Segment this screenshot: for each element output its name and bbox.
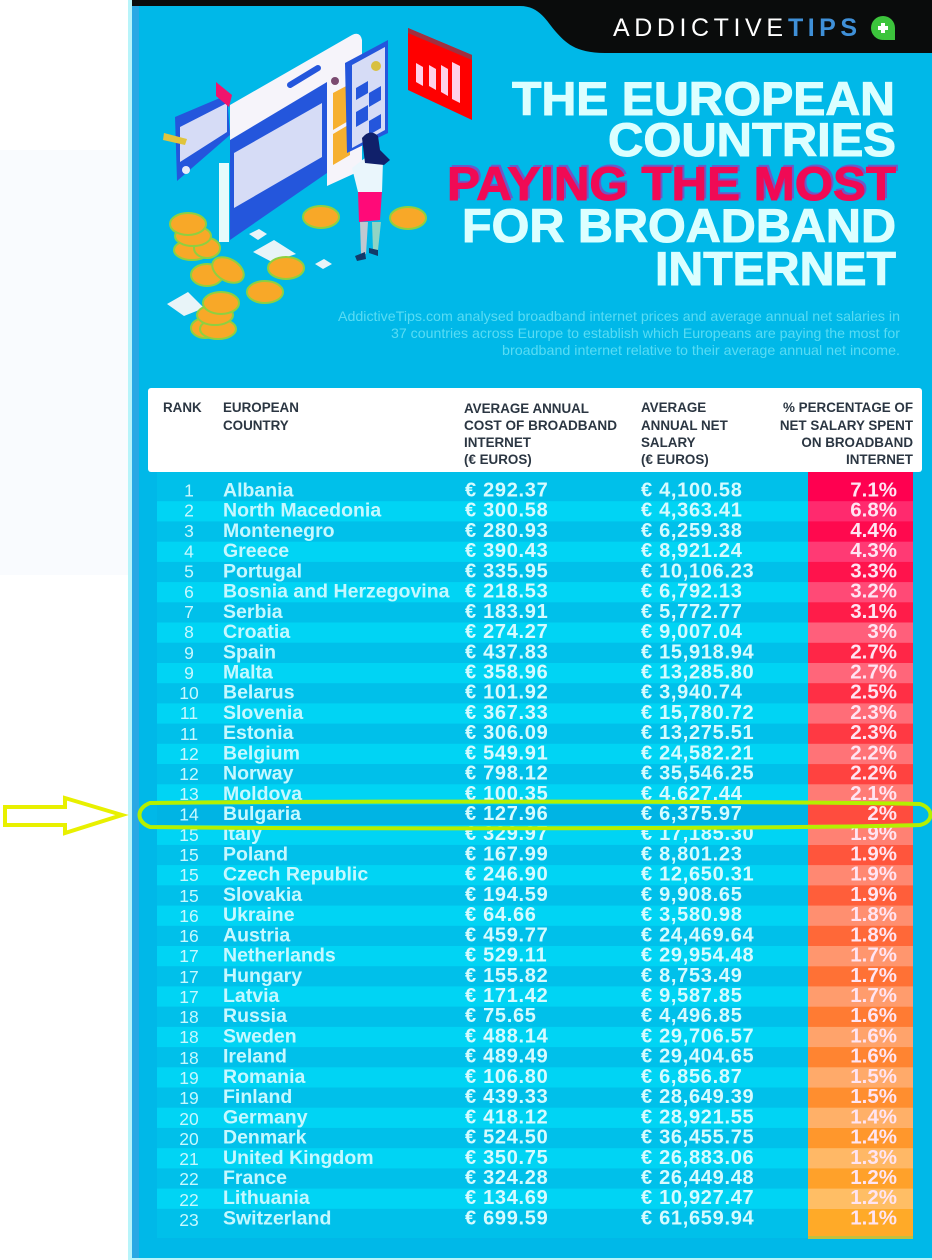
row: Moldova: 13 bbox=[179, 784, 199, 804]
row: Spain: 9 bbox=[184, 643, 194, 663]
row: Hungary: 1.7% bbox=[850, 964, 897, 987]
row: Slovakia: 1.9% bbox=[850, 883, 897, 906]
row: France: € 26,449.48 bbox=[641, 1167, 754, 1189]
white board bbox=[230, 34, 362, 186]
row: Romania: € 6,856.87 bbox=[641, 1066, 743, 1088]
row: Serbia: € 183.91 bbox=[465, 601, 548, 623]
row: Finland: € 439.33 bbox=[465, 1086, 548, 1108]
row: Norway: 2.2% bbox=[850, 762, 897, 785]
row: Spain bbox=[184, 640, 897, 663]
row: United Kingdom: United Kingdom bbox=[223, 1147, 374, 1169]
row: Slovakia: 15 bbox=[179, 886, 199, 906]
row: North Macedonia: € 300.58 bbox=[465, 500, 548, 522]
table header: SALARY bbox=[641, 435, 696, 450]
row: Norway: Norway bbox=[223, 763, 294, 785]
row: Slovakia: Slovakia bbox=[223, 884, 302, 906]
row: Bosnia and Herzegovina bbox=[184, 580, 897, 603]
row: Latvia: 17 bbox=[179, 987, 199, 1007]
row: Malta: 9 bbox=[184, 663, 194, 683]
row: Spain: 2.7% bbox=[850, 640, 897, 663]
row: Greece: € 8,921.24 bbox=[641, 540, 743, 562]
row: France: France bbox=[223, 1167, 287, 1189]
row: Slovenia: 2.3% bbox=[850, 701, 897, 724]
table header: RANK bbox=[163, 400, 202, 415]
woman bbox=[352, 132, 390, 261]
row: Russia bbox=[179, 1004, 897, 1027]
row: Sweden: € 488.14 bbox=[465, 1025, 549, 1047]
row: Finland: 1.5% bbox=[850, 1085, 897, 1108]
row: Italy: € 329.97 bbox=[465, 823, 548, 845]
row: Romania: 1.5% bbox=[850, 1065, 897, 1088]
row: Slovenia: 11 bbox=[180, 703, 198, 723]
row: Denmark: € 36,455.75 bbox=[641, 1126, 754, 1148]
phone bbox=[345, 40, 388, 153]
row: Romania: 19 bbox=[179, 1068, 199, 1088]
table header: COUNTRY bbox=[223, 418, 289, 433]
orange panels on board bbox=[333, 84, 350, 130]
row: Portugal: € 10,106.23 bbox=[641, 560, 754, 582]
row: United Kingdom: € 26,883.06 bbox=[641, 1147, 754, 1169]
row: Albania bbox=[184, 478, 897, 502]
row: Germany: 20 bbox=[179, 1109, 199, 1129]
row: Slovenia: € 367.33 bbox=[465, 702, 548, 724]
row: Croatia bbox=[184, 620, 897, 643]
row: Czech Republic: € 12,650.31 bbox=[641, 864, 754, 886]
row: Greece: 4 bbox=[184, 542, 194, 562]
row: Belgium: € 549.91 bbox=[465, 742, 548, 764]
row: Germany: Germany bbox=[223, 1106, 308, 1128]
row: France bbox=[179, 1166, 897, 1189]
table row stripes bbox=[157, 472, 808, 1238]
row: Bulgaria: € 6,375.97 bbox=[641, 803, 743, 825]
row: Italy: Italy bbox=[223, 823, 262, 845]
row: Russia: 1.6% bbox=[850, 1004, 897, 1027]
row: Belgium: 2.2% bbox=[850, 741, 897, 764]
row: Belgium: € 24,582.21 bbox=[641, 742, 754, 764]
row: Belgium: 12 bbox=[179, 744, 199, 764]
row: Russia: Russia bbox=[223, 1005, 287, 1027]
row: Sweden: 1.6% bbox=[850, 1024, 897, 1047]
row: Denmark bbox=[179, 1126, 897, 1149]
row: North Macedonia: North Macedonia bbox=[223, 500, 381, 522]
row: Ukraine: 1.8% bbox=[850, 903, 897, 926]
row: Spain: Spain bbox=[223, 641, 276, 663]
intro text: broadband internet relative to their average annual net income. bbox=[502, 342, 900, 358]
title: INTERNET bbox=[655, 243, 896, 296]
row: Denmark: Denmark bbox=[223, 1126, 307, 1148]
row: Montenegro: 3 bbox=[184, 521, 194, 541]
row: Russia: € 75.65 bbox=[465, 1005, 537, 1027]
logo: AddictiveTips: TIPS bbox=[788, 14, 857, 42]
row: Poland bbox=[179, 842, 897, 866]
table header: INTERNET bbox=[846, 452, 914, 467]
table header: EUROPEAN bbox=[223, 400, 299, 415]
row: Croatia: € 274.27 bbox=[465, 621, 548, 643]
row: Czech Republic bbox=[179, 863, 897, 886]
percentage column colour scale bbox=[808, 472, 913, 1239]
row: Ireland: € 489.49 bbox=[465, 1046, 548, 1068]
row: Denmark: € 524.50 bbox=[465, 1126, 548, 1148]
row: Czech Republic: € 246.90 bbox=[465, 864, 548, 886]
row: Poland: 1.9% bbox=[850, 842, 897, 866]
row: North Macedonia: 6.8% bbox=[850, 499, 897, 522]
row: Moldova bbox=[179, 782, 897, 805]
row: Ireland: € 29,404.65 bbox=[641, 1046, 754, 1068]
row: France: 22 bbox=[179, 1169, 199, 1189]
row: Ireland: Ireland bbox=[223, 1046, 287, 1068]
row: North Macedonia: € 4,363.41 bbox=[641, 500, 743, 522]
row: United Kingdom: 21 bbox=[179, 1149, 199, 1169]
row: Poland: € 167.99 bbox=[465, 844, 548, 866]
highlight oval around Bulgaria bbox=[140, 802, 930, 828]
intro text: AddictiveTips.com analysed broadband internet prices and average annual net salaries in bbox=[338, 308, 900, 324]
row: Hungary: 17 bbox=[179, 967, 199, 987]
row: Portugal: 5 bbox=[184, 562, 194, 582]
row: Bulgaria bbox=[157, 802, 897, 825]
row: Austria: 1.8% bbox=[850, 923, 897, 946]
row: Montenegro: € 280.93 bbox=[465, 520, 548, 542]
blue pill and dots bbox=[290, 68, 318, 85]
row: Croatia: 8 bbox=[184, 622, 194, 642]
row: Albania: 7.1% bbox=[850, 478, 897, 502]
row: Norway: € 798.12 bbox=[465, 763, 548, 785]
row: Moldova: 2.1% bbox=[850, 782, 897, 805]
row: Portugal bbox=[184, 559, 897, 582]
row: Denmark: 20 bbox=[179, 1129, 199, 1149]
row: Sweden: € 29,706.57 bbox=[641, 1025, 754, 1047]
row: Spain: € 15,918.94 bbox=[641, 641, 755, 663]
title: FOR BROADBAND bbox=[462, 200, 896, 253]
row: Slovakia: € 194.59 bbox=[465, 884, 548, 906]
row: Hungary: € 155.82 bbox=[465, 965, 548, 987]
table header: ANNUAL NET bbox=[641, 418, 729, 433]
table header: COST OF BROADBAND bbox=[464, 418, 617, 433]
row: Russia: € 4,496.85 bbox=[641, 1005, 743, 1027]
row: Estonia: 11 bbox=[180, 724, 198, 744]
row: Croatia: € 9,007.04 bbox=[641, 621, 743, 643]
row: Latvia: € 171.42 bbox=[465, 985, 548, 1007]
row: Sweden bbox=[179, 1024, 897, 1047]
row: Italy: 1.9% bbox=[850, 822, 897, 845]
row: Latvia: 1.7% bbox=[850, 984, 897, 1007]
row: Hungary: Hungary bbox=[223, 965, 302, 987]
row: Netherlands bbox=[179, 944, 897, 967]
title bbox=[447, 73, 896, 296]
row: Bosnia and Herzegovina: 3.2% bbox=[850, 580, 897, 603]
table header: % PERCENTAGE OF bbox=[783, 400, 913, 415]
row: Latvia: € 9,587.85 bbox=[641, 985, 743, 1007]
row: North Macedonia bbox=[184, 499, 897, 522]
row: Switzerland: 1.1% bbox=[850, 1206, 897, 1229]
row: Netherlands: 17 bbox=[179, 946, 199, 966]
row: Moldova: € 100.35 bbox=[465, 783, 548, 805]
row: Malta bbox=[184, 660, 897, 684]
row: Malta: Malta bbox=[223, 662, 273, 684]
row: Ukraine: Ukraine bbox=[223, 904, 295, 926]
table header: (€ EUROS) bbox=[641, 452, 709, 467]
row: Norway bbox=[179, 762, 897, 785]
left small screen bbox=[175, 95, 230, 181]
row: Denmark: 1.4% bbox=[850, 1126, 897, 1148]
paper diamonds bbox=[167, 229, 332, 316]
large blue screen bbox=[230, 82, 327, 240]
row: Greece: Greece bbox=[223, 540, 289, 562]
row: Germany: 1.4% bbox=[850, 1105, 897, 1128]
row: Ukraine bbox=[179, 903, 897, 926]
row: Slovenia: € 15,780.72 bbox=[641, 702, 754, 724]
table header bbox=[148, 388, 922, 472]
row: Ireland: 1.6% bbox=[850, 1045, 897, 1068]
intro text bbox=[338, 308, 900, 358]
row: Estonia: € 13,275.51 bbox=[641, 722, 754, 744]
row: Malta: € 358.96 bbox=[465, 662, 548, 684]
row: Switzerland bbox=[179, 1206, 897, 1230]
row: Bulgaria: Bulgaria bbox=[223, 803, 301, 825]
row: Slovakia bbox=[179, 883, 897, 906]
row: Germany: € 28,921.55 bbox=[641, 1106, 754, 1128]
row: Moldova: € 4,627.44 bbox=[641, 783, 743, 805]
row: Bulgaria: € 127.96 bbox=[465, 803, 548, 825]
row: Portugal: Portugal bbox=[223, 560, 302, 582]
row: Finland: 19 bbox=[179, 1088, 199, 1108]
row: Albania: Albania bbox=[223, 480, 294, 502]
row: Ukraine: € 3,580.98 bbox=[641, 904, 743, 926]
row: Germany: € 418.12 bbox=[465, 1106, 548, 1128]
row: Italy bbox=[179, 822, 897, 845]
row: Ukraine: 16 bbox=[179, 906, 199, 926]
row: Montenegro: € 6,259.38 bbox=[641, 520, 743, 542]
row: Austria: € 24,469.64 bbox=[641, 924, 755, 946]
row: Bosnia and Herzegovina: 6 bbox=[184, 582, 194, 602]
row: United Kingdom: 1.3% bbox=[850, 1146, 897, 1169]
row: Germany bbox=[179, 1105, 897, 1129]
arrow pointing to Bulgaria bbox=[5, 798, 122, 833]
row: Austria: Austria bbox=[223, 924, 290, 946]
logo: AddictiveTips: ADDICTIVE bbox=[613, 14, 783, 42]
illustration: web screens, woman and coins bbox=[163, 28, 472, 339]
row: Belarus: 2.5% bbox=[850, 681, 897, 704]
row: Portugal: € 335.95 bbox=[465, 560, 548, 582]
row: Belarus bbox=[179, 681, 897, 704]
row: Slovenia bbox=[180, 701, 897, 724]
row: Lithuania: 1.2% bbox=[850, 1186, 897, 1209]
row: Netherlands: Netherlands bbox=[223, 945, 336, 967]
row: Switzerland: 23 bbox=[179, 1210, 199, 1230]
row: Lithuania: 22 bbox=[179, 1190, 199, 1210]
row: Sweden: 18 bbox=[179, 1027, 199, 1047]
row: Estonia: 2.3% bbox=[850, 721, 897, 744]
row: France: € 324.28 bbox=[465, 1167, 548, 1189]
row: Serbia bbox=[184, 600, 897, 623]
row: Switzerland: Switzerland bbox=[223, 1207, 331, 1229]
table header: AVERAGE bbox=[641, 400, 706, 415]
row: Spain: € 437.83 bbox=[465, 641, 548, 663]
row: Greece bbox=[184, 539, 897, 562]
row: Austria: 16 bbox=[179, 926, 199, 946]
row: Austria bbox=[179, 923, 897, 946]
row: Netherlands: € 529.11 bbox=[465, 945, 547, 967]
row: Lithuania: Lithuania bbox=[223, 1187, 310, 1209]
row: Croatia: 3% bbox=[867, 620, 897, 643]
row: Croatia: Croatia bbox=[223, 621, 290, 643]
row: Italy: 15 bbox=[179, 825, 199, 845]
row: Belgium: Belgium bbox=[223, 742, 300, 764]
table header: AVERAGE ANNUAL bbox=[464, 401, 589, 416]
row: Serbia: 7 bbox=[184, 602, 194, 622]
row: Finland: Finland bbox=[223, 1086, 292, 1108]
row: Malta: € 13,285.80 bbox=[641, 662, 754, 684]
row: Lithuania: € 134.69 bbox=[465, 1187, 548, 1209]
row: Albania: € 292.37 bbox=[465, 480, 548, 502]
row: Belgium bbox=[179, 741, 897, 764]
row: Albania: € 4,100.58 bbox=[641, 480, 743, 502]
row: Estonia: Estonia bbox=[223, 722, 294, 744]
row: Albania: 1 bbox=[184, 480, 194, 500]
row: Serbia: Serbia bbox=[223, 601, 283, 623]
intro text: 37 countries across Europe to establish which Europeans are paying the most for bbox=[391, 325, 900, 341]
gold coins bbox=[170, 206, 426, 339]
row: Poland: € 8,801.23 bbox=[641, 844, 743, 866]
logo: AddictiveTips bbox=[613, 14, 895, 42]
row: Romania: € 106.80 bbox=[465, 1066, 548, 1088]
row: Finland: € 28,649.39 bbox=[641, 1086, 754, 1108]
row: Netherlands: € 29,954.48 bbox=[641, 945, 754, 967]
row: Poland: 15 bbox=[179, 845, 199, 865]
row: Montenegro: Montenegro bbox=[223, 520, 335, 542]
row: Belarus: 10 bbox=[179, 683, 199, 703]
row: Slovenia: Slovenia bbox=[223, 702, 303, 724]
row: Portugal: 3.3% bbox=[850, 559, 897, 582]
row: Belarus: Belarus bbox=[223, 682, 295, 704]
title: PAYING THE MOST bbox=[447, 158, 896, 211]
row: Montenegro: 4.4% bbox=[850, 519, 897, 542]
row: Estonia: € 306.09 bbox=[465, 722, 548, 744]
table header: INTERNET bbox=[464, 435, 532, 450]
row: Lithuania bbox=[179, 1186, 897, 1210]
row: Finland bbox=[179, 1085, 897, 1108]
row: Hungary: € 8,753.49 bbox=[641, 965, 743, 987]
row: United Kingdom: € 350.75 bbox=[465, 1147, 548, 1169]
row: Ukraine: € 64.66 bbox=[465, 904, 537, 926]
row: Malta: 2.7% bbox=[850, 660, 897, 684]
row: Serbia: € 5,772.77 bbox=[641, 601, 743, 623]
row: France: 1.2% bbox=[850, 1166, 897, 1189]
yellow ticket bbox=[163, 133, 187, 145]
row: Czech Republic: 15 bbox=[179, 865, 199, 885]
row: Greece: € 390.43 bbox=[465, 540, 548, 562]
row: Belarus: € 3,940.74 bbox=[641, 682, 743, 704]
row: Romania: Romania bbox=[223, 1066, 306, 1088]
row: United Kingdom bbox=[179, 1146, 897, 1169]
row: Montenegro bbox=[184, 519, 897, 542]
row: North Macedonia: 2 bbox=[184, 501, 194, 521]
table header: NET SALARY SPENT bbox=[780, 418, 914, 433]
board post bbox=[219, 163, 229, 242]
row: Bosnia and Herzegovina: Bosnia and Herzegovina bbox=[223, 581, 450, 603]
row: Romania bbox=[179, 1065, 897, 1088]
row: Belarus: € 101.92 bbox=[465, 682, 548, 704]
row: Estonia bbox=[180, 721, 897, 744]
row: Slovakia: € 9,908.65 bbox=[641, 884, 743, 906]
title: THE EUROPEAN bbox=[512, 73, 895, 126]
red chart icon bbox=[408, 28, 472, 120]
row: Latvia: Latvia bbox=[223, 985, 280, 1007]
header black banner bbox=[132, 0, 932, 53]
row: Ireland: 18 bbox=[179, 1048, 199, 1068]
row: Bosnia and Herzegovina: € 218.53 bbox=[465, 581, 548, 603]
row: Switzerland: € 699.59 bbox=[465, 1207, 548, 1229]
row: Lithuania: € 10,927.47 bbox=[641, 1187, 754, 1209]
row: Bulgaria: 14 bbox=[179, 804, 199, 824]
row: Ireland bbox=[179, 1045, 897, 1068]
table header: (€ EUROS) bbox=[464, 452, 532, 467]
row: Austria: € 459.77 bbox=[465, 924, 548, 946]
row: Switzerland: € 61,659.94 bbox=[641, 1207, 755, 1229]
row: Sweden: Sweden bbox=[223, 1025, 297, 1047]
row: Latvia bbox=[179, 984, 897, 1007]
row: Hungary bbox=[179, 964, 897, 987]
row: Serbia: 3.1% bbox=[850, 600, 897, 623]
table rows bbox=[157, 478, 897, 1230]
row: Norway: € 35,546.25 bbox=[641, 763, 754, 785]
row: Bulgaria: 2% bbox=[867, 802, 897, 825]
pink tag bbox=[216, 82, 232, 107]
title: COUNTRIES bbox=[608, 114, 896, 167]
row: Norway: 12 bbox=[179, 764, 199, 784]
row: Czech Republic: 1.9% bbox=[850, 863, 897, 886]
row: Moldova: Moldova bbox=[223, 783, 302, 805]
row: Italy: € 17,185.30 bbox=[641, 823, 754, 845]
row: Netherlands: 1.7% bbox=[850, 944, 897, 967]
row: Bosnia and Herzegovina: € 6,792.13 bbox=[641, 581, 743, 603]
row: Greece: 4.3% bbox=[850, 539, 897, 562]
row: Czech Republic: Czech Republic bbox=[223, 864, 368, 886]
row: Poland: Poland bbox=[223, 844, 288, 866]
row: Russia: 18 bbox=[179, 1007, 199, 1027]
table header: ON BROADBAND bbox=[801, 435, 913, 450]
